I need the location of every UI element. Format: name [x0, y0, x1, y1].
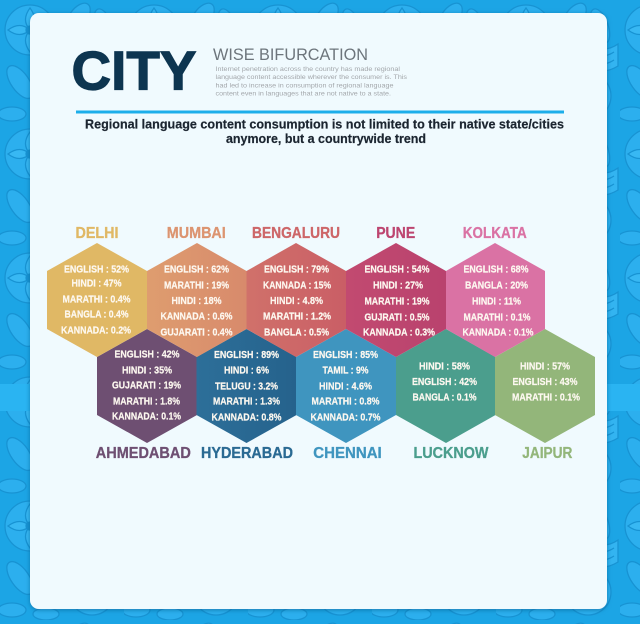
city hexagon: Ahmedabad: GUJARATI : 19%: [112, 380, 181, 392]
city hexagon: Jaipur: ENGLISH : 43%: [512, 377, 578, 388]
city hexagon: Chennai: TAMIL : 9%: [322, 366, 369, 376]
city label: Mumbai: MUMBAI: [167, 225, 226, 242]
city hexagon: Mumbai: KANNADA : 0.6%: [160, 312, 233, 322]
city label: Ahmedabad: AHMEDABAD: [96, 445, 191, 462]
intro text block: had led to increase in consumption of regional language: [216, 82, 394, 90]
city hexagon: Bengaluru: KANNADA : 15%: [263, 280, 331, 292]
city hexagon: Pune: HINDI : 27%: [373, 280, 423, 292]
intro text block: [216, 66, 408, 98]
city hexagon: Delhi: KANNADA: 0.2%: [61, 326, 131, 336]
city hexagon: Ahmedabad: [97, 329, 197, 443]
city hexagon: Hyderabad: ENGLISH : 89%: [214, 350, 279, 361]
city hexagon: Ahmedabad: KANNADA: 0.1%: [112, 412, 181, 422]
city hexagon: Lucknow: [396, 329, 496, 443]
city label: Pune: PUNE: [376, 225, 415, 242]
city hexagon: Pune: [346, 243, 446, 357]
city hexagon: Jaipur: MARATHI : 0.1%: [512, 392, 580, 404]
city hexagon: Mumbai: HINDI : 18%: [172, 296, 222, 307]
city hexagon: Mumbai: MARATHI : 19%: [164, 280, 229, 292]
city hexagon: Delhi: MARATHI : 0.4%: [62, 294, 131, 306]
city label: Chennai: CHENNAI: [313, 445, 382, 462]
city hexagon: Chennai: [296, 329, 396, 443]
city hexagon: Chennai: HINDI : 4.6%: [319, 382, 372, 392]
city hexagon: Delhi: BANGLA : 0.4%: [64, 310, 129, 320]
city hexagon: Bengaluru: BANGLA : 0.5%: [264, 328, 329, 338]
city hexagon: Pune: KANNADA : 0.3%: [363, 328, 435, 338]
headline statement: anymore, but a countrywide trend: [226, 131, 426, 146]
city hexagon: Kolkata: KANNADA : 0.1%: [462, 328, 534, 338]
city hexagon: Pune: MARATHI : 19%: [364, 296, 430, 308]
city hexagon: Kolkata: MARATHI : 0.1%: [464, 312, 531, 324]
city hexagon: Mumbai: ENGLISH : 62%: [164, 264, 229, 276]
city hexagon: Bengaluru: MARATHI : 1.2%: [263, 312, 331, 322]
city label: Hyderabad: HYDERABAD: [201, 445, 293, 462]
city label: Bengaluru: BENGALURU: [252, 225, 340, 242]
headline statement: [85, 116, 564, 146]
city hexagon: Bengaluru: [246, 243, 346, 357]
city hexagon: Hyderabad: HINDI : 6%: [224, 366, 269, 376]
city hexagon: Hyderabad: [196, 329, 296, 443]
city hexagon: Kolkata: ENGLISH : 68%: [464, 264, 529, 276]
city hexagon: Pune: ENGLISH : 54%: [364, 264, 430, 276]
city hexagon: Kolkata: [446, 243, 545, 357]
city hexagon: Kolkata: BANGLA : 20%: [465, 280, 528, 292]
city hexagon: Ahmedabad: ENGLISH : 42%: [114, 350, 180, 360]
intro text block: content even in languages that are not native to a state.: [216, 90, 391, 98]
subtitle: wise bifurcation: WISE BIFURCATION: [213, 46, 368, 64]
city hexagon: Ahmedabad: HINDI : 35%: [122, 366, 172, 376]
title: CITY: CITY: [72, 40, 196, 102]
city hexagon: Jaipur: HINDI : 57%: [520, 362, 570, 372]
city hexagon: Ahmedabad: MARATHI : 1.8%: [113, 396, 180, 408]
city hexagon: Jaipur: [495, 329, 595, 443]
city hexagon: Bengaluru: ENGLISH : 79%: [264, 264, 329, 276]
city label: Kolkata: KOLKATA: [463, 225, 527, 242]
city hexagon: Chennai: MARATHI : 0.8%: [312, 396, 380, 408]
city label: Delhi: DELHI: [76, 225, 118, 242]
blue divider rule: [76, 110, 564, 114]
city hexagon: Hyderabad: MARATHI : 1.3%: [213, 396, 280, 408]
city label: Jaipur: JAIPUR: [522, 445, 572, 462]
city hexagon: Chennai: ENGLISH : 85%: [313, 350, 378, 361]
city hexagon: Lucknow: HINDI : 58%: [419, 362, 470, 372]
intro text block: language content accessible wherever the consumer is. This: [216, 74, 408, 81]
intro text block: Internet penetration across the country has made regional: [216, 66, 401, 73]
city label: Lucknow: LUCKNOW: [414, 445, 489, 462]
city hexagon: Lucknow: BANGLA : 0.1%: [412, 392, 477, 404]
city hexagon: Delhi: ENGLISH : 52%: [64, 264, 129, 276]
city hexagon: Bengaluru: HINDI : 4.8%: [270, 296, 323, 307]
city hexagon: Hyderabad: KANNADA: 0.8%: [212, 412, 282, 424]
city hexagon: Hyderabad: TELUGU : 3.2%: [215, 382, 278, 392]
city hexagon: Delhi: [47, 243, 147, 357]
city hexagon: Mumbai: GUJARATI : 0.4%: [160, 328, 233, 338]
headline statement: Regional language content consumption is not limited to their native state/cities: [85, 116, 564, 132]
city hexagon: Pune: GUJRATI : 0.5%: [364, 312, 430, 324]
city hexagon: Lucknow: ENGLISH : 42%: [412, 377, 477, 388]
city hexagon: Mumbai: [147, 243, 246, 357]
city hexagon: Delhi: HINDI : 47%: [72, 278, 122, 290]
city hexagon: Kolkata: HINDI : 11%: [472, 296, 521, 308]
city hexagon: Chennai: KANNADA: 0.7%: [310, 412, 381, 424]
